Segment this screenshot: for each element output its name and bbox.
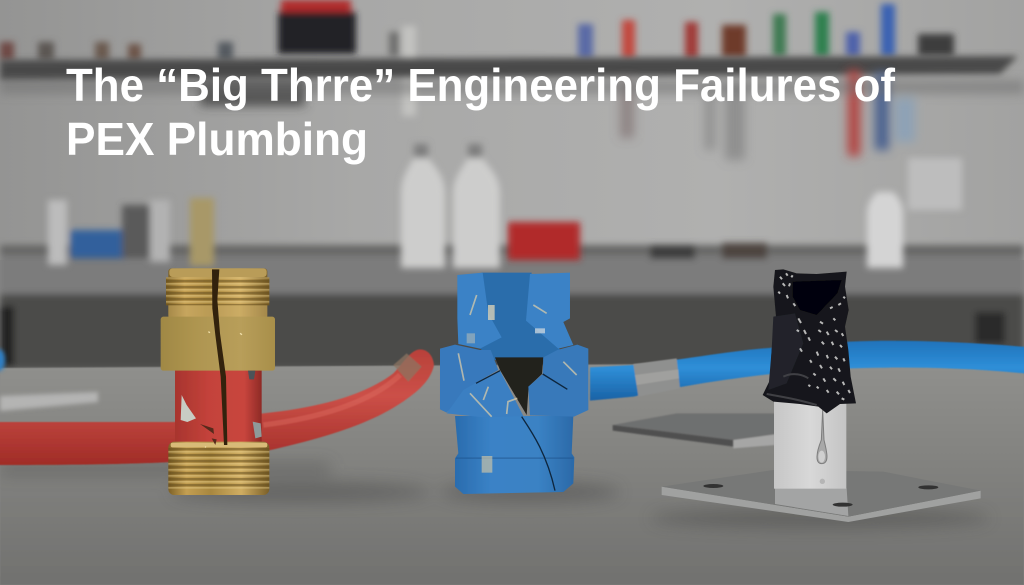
- white pipe: [774, 397, 846, 489]
- title line 2: PEX Plumbing: [66, 113, 368, 165]
- front metal plate: [662, 470, 981, 522]
- table shadows: [0, 463, 990, 528]
- white strip on table: [0, 392, 98, 411]
- blue pipe: [590, 341, 1024, 401]
- counter: [0, 243, 1024, 370]
- cracks: [476, 371, 567, 491]
- hanging tools: [0, 70, 1024, 160]
- top brass thread: [166, 268, 269, 318]
- red pipe: [0, 349, 434, 465]
- rear metal plate: [613, 413, 775, 448]
- left collar piece: [440, 345, 498, 413]
- table surface: [0, 362, 1024, 585]
- failure 1: cracked brass fitting on red pipe: [161, 268, 275, 495]
- brass collar: [161, 317, 275, 371]
- dark hollow: [495, 357, 543, 415]
- paint chips: [181, 395, 196, 422]
- upper shelf: [0, 56, 1018, 80]
- top centre channel: [480, 273, 560, 360]
- blurred shelf tools: [0, 0, 954, 116]
- top right chunk: [526, 273, 573, 349]
- failure 2: shattered blue fitting: [440, 273, 588, 494]
- title: [66, 59, 896, 165]
- top left chunk: [457, 273, 502, 349]
- bottom brass thread: [168, 442, 269, 495]
- red body: [175, 368, 262, 447]
- right collar piece: [528, 345, 588, 417]
- small blue pipe end: [0, 349, 5, 371]
- background bottles and boxes: [48, 144, 962, 268]
- failure 3: melted black tape on white pipe: [662, 269, 981, 522]
- wall background: [0, 0, 1024, 260]
- title line 1: The “Big Thrre” Engineering Failures of: [66, 59, 896, 111]
- crack: [212, 269, 227, 445]
- scratches: [458, 295, 577, 417]
- black melted tape: [763, 269, 856, 413]
- blue bottom section: [455, 416, 574, 494]
- water drop: [817, 410, 827, 484]
- front collar piece: [447, 371, 523, 417]
